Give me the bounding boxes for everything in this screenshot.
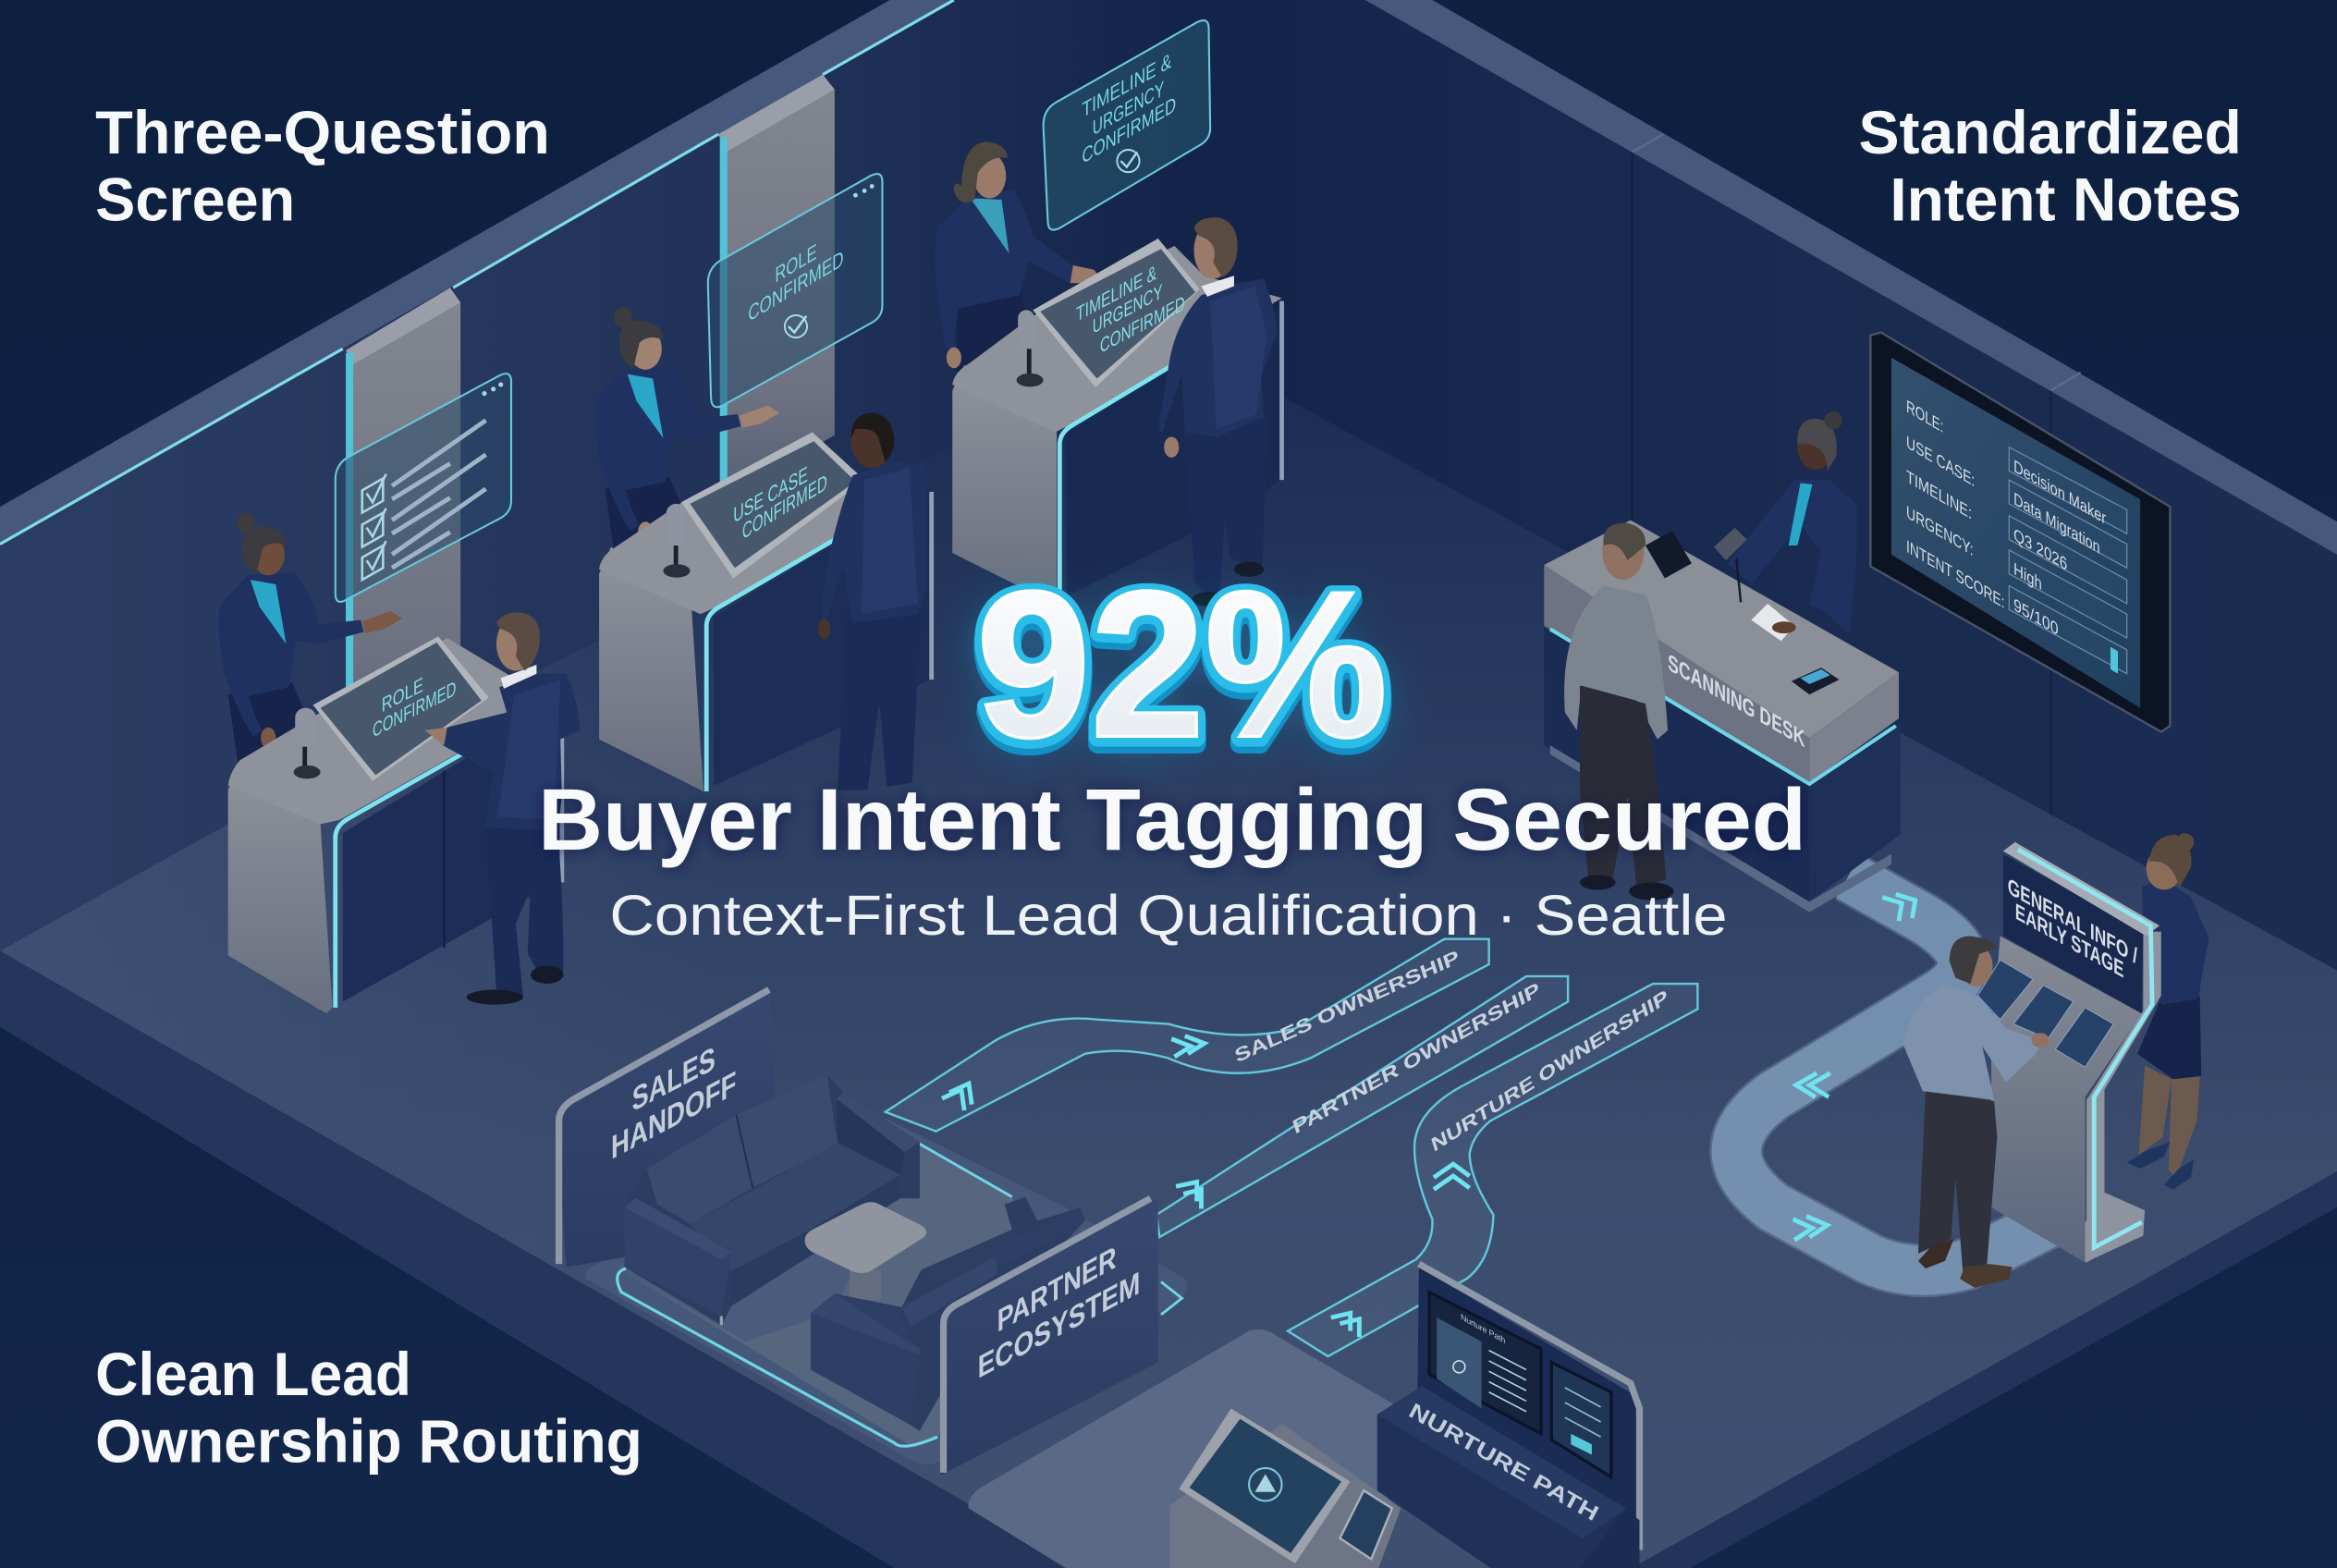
intent note value fields xyxy=(2009,447,2127,674)
section heading: three-question screen: Screen xyxy=(95,166,295,235)
nurture area pad xyxy=(968,1329,1401,1568)
kiosk header label: GENERAL INFO / xyxy=(2008,874,2137,969)
sign: sales handoff: HANDOFF xyxy=(611,1065,736,1168)
desk 3 station xyxy=(952,239,1285,606)
microphone xyxy=(1017,310,1044,386)
section heading: three-question screen xyxy=(95,99,550,235)
left back wall xyxy=(0,0,1178,951)
tablet: timeline and urgency confirmed: URGENCY xyxy=(1093,279,1163,338)
subtitle: Context-First Lead Qualification · Seattle xyxy=(609,884,1728,947)
wall tablet: standardized intent notes: INTENT SCORE: xyxy=(1906,537,2004,613)
intent note value fields: Q3 2026 xyxy=(2013,525,2067,575)
desk 1 station xyxy=(228,636,562,1013)
wall tablet: standardized intent notes: TIMELINE: xyxy=(1906,467,1972,523)
kiosk header label: EARLY STAGE xyxy=(2015,900,2123,983)
tablet: use case confirmed xyxy=(681,433,864,579)
floating panel: timeline and urgency confirmed: URGENCY xyxy=(1093,77,1164,141)
nurture kiosk with video tablet xyxy=(1170,1408,1401,1568)
routing path: loop from scanning desk to general info kiosk xyxy=(1736,876,2049,1270)
staff member behind desk 2 xyxy=(596,307,779,562)
floating panel: timeline and urgency confirmed: CONFIRMED xyxy=(1082,92,1176,169)
intent note value fields: 95/100 xyxy=(2013,595,2059,640)
lounge sofa xyxy=(625,1074,920,1325)
sign: partner ecosystem xyxy=(940,1197,1158,1476)
grey wall pillars with cyan light strips xyxy=(0,0,954,770)
scanning desk label: SCANNING DESK xyxy=(1668,649,1805,753)
floating panel: role confirmed: ROLE xyxy=(775,239,817,288)
wall tablet: standardized intent notes: USE CASE: xyxy=(1906,433,1975,491)
intent note value fields: High xyxy=(2013,559,2042,594)
floor platform xyxy=(0,336,2337,1568)
routing path: nurture ownership xyxy=(1288,984,1697,1356)
visitor at desk 1 xyxy=(424,612,580,1005)
section heading: clean lead ownership routing: Clean Lead xyxy=(95,1341,411,1409)
section heading: three-question screen: Three-Question xyxy=(95,99,550,167)
section heading: clean lead ownership routing: Ownership Routing xyxy=(95,1408,642,1476)
tablet: role confirmed: ROLE xyxy=(382,672,423,717)
intent note value fields: Data Migration xyxy=(2013,489,2100,558)
nurture path plinth: NURTURE PATH xyxy=(1407,1398,1600,1528)
kiosk brochures xyxy=(1977,960,2113,1067)
routing path: partner ownership xyxy=(1156,976,1568,1237)
second lounge sofa xyxy=(811,1197,1085,1431)
nurture ownership label: NURTURE OWNERSHIP xyxy=(1429,986,1670,1157)
nurture main screen: Nurture Path xyxy=(1461,1312,1505,1346)
nurture main screen xyxy=(1429,1292,1541,1434)
scanning desk xyxy=(1544,521,1901,913)
section heading: standardized intent notes: Standardized xyxy=(1858,99,2242,167)
tablet: timeline and urgency confirmed: CONFIRMED xyxy=(1100,291,1185,358)
tablet: role confirmed xyxy=(313,636,489,781)
sign: sales handoff: SALES xyxy=(632,1040,716,1120)
hero statistic: 92%: 92% xyxy=(972,557,1389,790)
wall tablet: standardized intent notes: ROLE: xyxy=(1906,397,1943,437)
main headline: Buyer Intent Tagging Secured xyxy=(538,773,1806,871)
desk 2 station xyxy=(599,433,932,791)
visitor at desk 2 xyxy=(818,413,927,790)
intent note value fields: Decision Maker xyxy=(2013,457,2106,529)
section heading: clean lead ownership routing xyxy=(95,1341,642,1476)
tablet: use case confirmed: CONFIRMED xyxy=(742,470,827,545)
staff member behind desk 3 xyxy=(935,141,1100,373)
tablet: timeline and urgency confirmed xyxy=(1033,239,1200,387)
main headline: Buyer Intent Tagging Secured xyxy=(538,771,1806,869)
microphone xyxy=(294,708,321,778)
floating panel: role confirmed xyxy=(708,174,882,407)
nurture path plinth xyxy=(1377,1386,1639,1568)
lounge coffee table xyxy=(805,1202,926,1300)
floating panel: role confirmed: CONFIRMED xyxy=(748,246,844,327)
hero statistic: 92%: 92% xyxy=(976,555,1388,788)
kiosk visitor xyxy=(1903,936,2049,1288)
section heading: standardized intent notes: Intent Notes xyxy=(1890,166,2242,235)
microphone xyxy=(663,504,690,578)
sales handoff lounge carpet xyxy=(585,1113,1187,1464)
kiosk header label xyxy=(2008,874,2137,983)
nurture side screen xyxy=(1551,1363,1611,1477)
section heading: standardized intent notes xyxy=(1858,99,2242,235)
right wall ledge xyxy=(1365,0,2337,555)
sign: partner ecosystem: PARTNER xyxy=(997,1239,1117,1340)
staff member at scanning desk xyxy=(1714,411,1857,641)
general info kiosk xyxy=(1977,842,2161,1263)
floating panel: timeline and urgency confirmed: TIMELINE & xyxy=(1082,49,1171,123)
sign: sales handoff xyxy=(556,986,775,1267)
hero statistic: 92%: 92% xyxy=(976,549,1388,782)
tablet: timeline and urgency confirmed: TIMELINE & xyxy=(1076,260,1156,326)
tablet: use case confirmed: USE CASE xyxy=(733,462,808,528)
tablet: role confirmed: CONFIRMED xyxy=(373,676,456,742)
wall tablet: standardized intent notes xyxy=(1870,333,2170,732)
left wall ledge xyxy=(0,0,954,544)
kiosk staff member xyxy=(2127,833,2209,1190)
badge reader on desk xyxy=(1792,668,1840,694)
hero statistic: 92%: 92% xyxy=(976,547,1388,780)
sign: partner ecosystem: ECOSYSTEM xyxy=(978,1264,1140,1386)
nurture path display wall xyxy=(1417,1264,1639,1558)
partner ownership label: PARTNER OWNERSHIP xyxy=(1291,979,1543,1139)
staff member behind desk 1 xyxy=(219,513,402,767)
visitor at desk 3 xyxy=(1158,217,1278,606)
floating panel: timeline and urgency confirmed xyxy=(1044,20,1210,230)
wall tablet: standardized intent notes: URGENCY: xyxy=(1906,503,1974,560)
floating panel: checklist xyxy=(336,374,511,602)
visitor at scanning desk xyxy=(1564,523,1674,900)
routing path: sales ownership xyxy=(886,939,1489,1132)
chevrons on loop path xyxy=(1793,894,1915,1240)
sales ownership label: SALES OWNERSHIP xyxy=(1232,947,1462,1067)
right back wall xyxy=(1170,0,2337,971)
